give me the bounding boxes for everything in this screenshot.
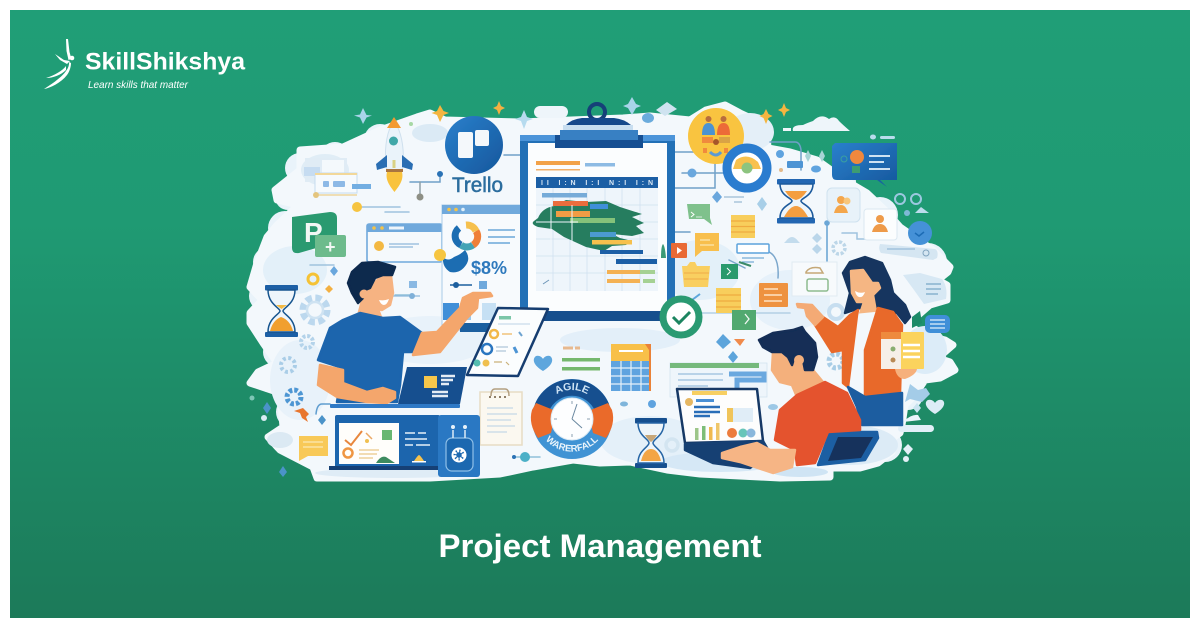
white top <box>848 313 877 388</box>
orange cardigan <box>865 308 902 397</box>
icon: Trello logo <box>445 116 503 197</box>
spreadsheet panel <box>670 363 767 397</box>
percent label: $8% <box>471 258 507 278</box>
lower arm <box>318 365 395 403</box>
laptop screen <box>677 389 763 443</box>
clipboard: gantt chart <box>520 104 675 321</box>
laptop <box>398 367 467 404</box>
plus: + <box>325 237 336 257</box>
accent nodes <box>308 150 845 462</box>
logo wordmark: SkillShikshya <box>85 48 246 76</box>
hair <box>759 327 817 370</box>
calendar <box>611 344 651 391</box>
laptop base <box>685 441 770 468</box>
gantt green shape <box>533 200 644 251</box>
neck and face <box>772 352 823 397</box>
clipboard: gantt chart: II I:N I:I N:I I:N <box>541 180 653 187</box>
chat and note icons <box>661 204 837 330</box>
held notebook <box>881 332 924 369</box>
forearm <box>722 443 795 473</box>
gantt header <box>536 177 658 188</box>
pie wedge <box>443 250 468 272</box>
device with gear <box>438 415 480 477</box>
neck and face <box>358 275 393 320</box>
gears <box>281 298 843 451</box>
cloud top right <box>783 116 850 131</box>
gantt grid <box>536 188 658 291</box>
icon: hourglass bottom <box>635 418 667 468</box>
big monitor <box>329 415 441 470</box>
check badge <box>663 294 700 335</box>
connector lines <box>310 138 877 457</box>
window panel: tasks <box>367 224 442 262</box>
tablet <box>467 308 548 376</box>
person: man at laptop <box>677 327 878 473</box>
icon: Microsoft Project <box>292 212 346 257</box>
person: man in blue shirt <box>318 262 492 408</box>
small panels top left <box>304 158 371 198</box>
title: Project Management <box>438 528 762 564</box>
illustration: project management scene <box>246 97 958 482</box>
clipboard clip <box>555 104 643 148</box>
hair <box>348 262 395 303</box>
icon: team badge <box>688 108 744 164</box>
blue t-shirt <box>318 313 422 402</box>
icon: rocket <box>376 117 413 192</box>
icon cards: people <box>827 188 938 260</box>
icon: hourglass right <box>777 179 815 224</box>
blue trousers <box>848 387 902 425</box>
logo tagline: Learn skills that matter <box>88 79 188 91</box>
icon: hourglass left <box>265 285 298 337</box>
face and neck <box>851 270 880 314</box>
icon: donut chart ring <box>727 148 767 188</box>
chair <box>818 432 878 465</box>
cloud backdrop <box>249 104 955 478</box>
pointing arm <box>413 293 492 355</box>
person: woman with cardigan <box>797 257 924 425</box>
donut chart <box>455 225 478 247</box>
label: AGILE: AGILE <box>556 382 590 394</box>
sparkles around the scene <box>250 97 950 477</box>
P letter: P <box>304 217 323 248</box>
chat bubble lower left <box>267 408 328 461</box>
hair <box>843 257 910 323</box>
icon: blue info card <box>832 143 897 187</box>
Trello label: Trello <box>452 174 503 197</box>
pointing hand <box>797 304 823 325</box>
red shirt <box>775 382 860 465</box>
notes clipboard <box>480 389 522 445</box>
label: WARERFALL: WARERFALL <box>546 435 598 452</box>
window panel: finance <box>392 205 522 332</box>
agile waterfall dial <box>530 379 614 459</box>
icon: leaping figure <box>44 39 74 89</box>
logo: SkillShikshya <box>44 39 246 91</box>
